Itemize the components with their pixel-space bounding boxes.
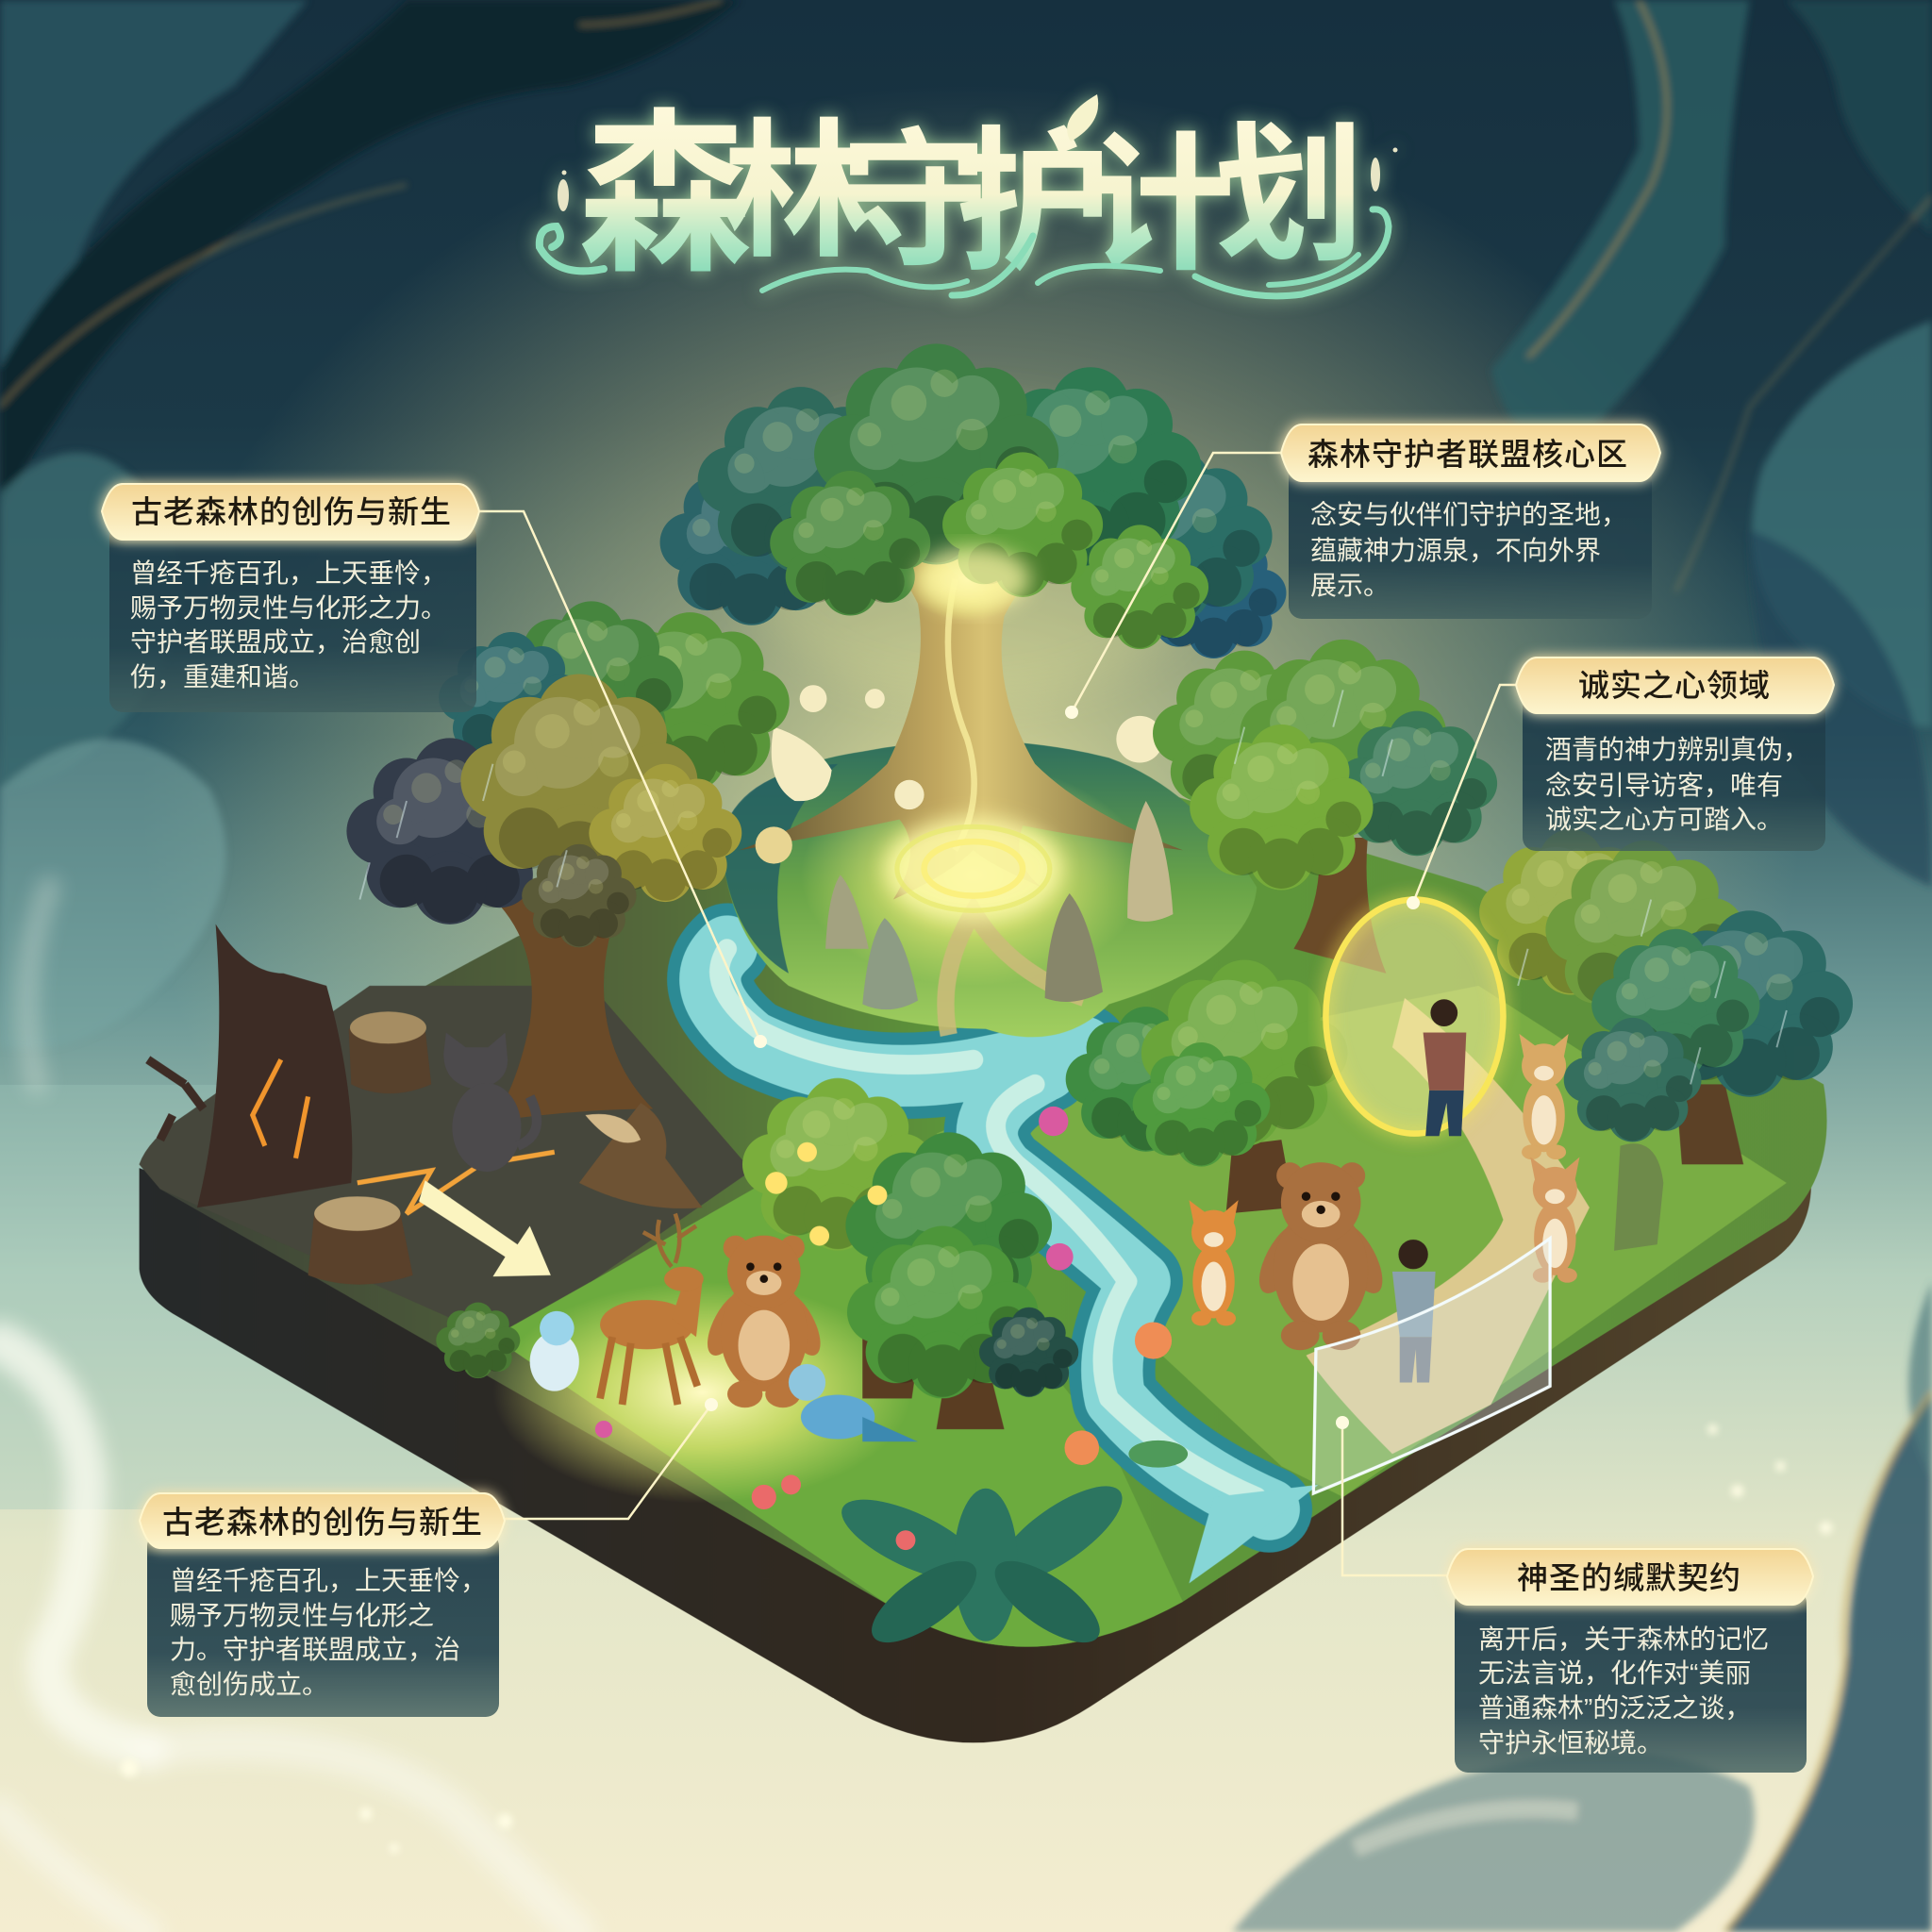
- panel body: [1455, 1590, 1807, 1773]
- body text: [1478, 1624, 1769, 1757]
- body text: 力。守护者联盟成立，治: [170, 1635, 460, 1664]
- heading plate: [1281, 425, 1660, 481]
- title: [540, 94, 1398, 296]
- forest spirits: [756, 685, 1163, 864]
- fox and kangaroo companions: [1189, 1034, 1663, 1325]
- panel body: [1523, 693, 1825, 851]
- bear in meadow: [699, 1236, 829, 1407]
- callout: alliance core: [1281, 425, 1660, 619]
- white bird: [530, 1311, 579, 1391]
- callout: honest heart domain: [1516, 658, 1834, 851]
- shrine glow spiral: [885, 817, 1062, 921]
- panel body: [147, 1533, 499, 1717]
- body text: 曾经千疮百孔，上天垂怜，: [130, 558, 447, 588]
- glowing honesty portal: [1325, 899, 1503, 1134]
- island ground surface: [140, 740, 1827, 1647]
- cut stump front: [308, 1205, 413, 1285]
- white smoke wisps left: [0, 887, 579, 1932]
- tree trunk left: [480, 862, 653, 1122]
- body text: 曾经千疮百孔，上天垂怜，: [170, 1566, 487, 1595]
- floating sparkles: [121, 1424, 1832, 1853]
- flowers: [595, 1107, 1188, 1550]
- body text: 守护者联盟成立，治愈创: [130, 627, 421, 657]
- body text: 离开后，关于森林的记忆: [1478, 1624, 1769, 1654]
- heading text: 古老森林的创伤与新生: [131, 494, 452, 529]
- connector: silence contract callout: [1336, 1416, 1447, 1575]
- broken stump right: [579, 1103, 702, 1208]
- heading plate: [102, 484, 479, 540]
- heading text: 神圣的缄默契约: [1517, 1560, 1741, 1595]
- body text: 守护永恒秘境。: [1478, 1728, 1663, 1757]
- panel body: [109, 524, 476, 712]
- sandy path: [1306, 998, 1590, 1454]
- body text: 愈创伤成立。: [170, 1670, 328, 1699]
- tree canopy: [660, 343, 1286, 658]
- title: 护: [957, 116, 1111, 290]
- body text: 赐予万物灵性与化形之: [170, 1601, 434, 1630]
- right forest trees: [1066, 640, 1853, 1214]
- connector: wound callout: [479, 511, 767, 1048]
- ink swirls top right: [1491, 0, 1932, 887]
- title: 计: [1086, 123, 1235, 289]
- body text: 无法言说，化作对“美丽: [1478, 1658, 1751, 1688]
- burnt tree stump: [148, 924, 702, 1285]
- heading plate: [1516, 658, 1834, 713]
- grey cat: [443, 1033, 537, 1172]
- ember cracks: [358, 1152, 555, 1214]
- tree trunk: [740, 506, 1183, 899]
- title: 林: [723, 109, 872, 275]
- body text: [1310, 500, 1627, 600]
- body text: 普通森林”的泛泛之谈，: [1478, 1693, 1751, 1723]
- callout: wounds and rebirth lower: [140, 1493, 505, 1717]
- rain streaks: [359, 690, 1787, 1084]
- bear with child: [1250, 1162, 1436, 1382]
- blue bird: [789, 1364, 918, 1441]
- body text: [1545, 735, 1809, 834]
- body text: 念安与伙伴们守护的圣地，: [1310, 500, 1627, 529]
- body text: 酒青的神力辨别真伪，: [1545, 735, 1809, 764]
- heading text: 诚实之心领域: [1578, 668, 1771, 703]
- title leaf: [1067, 94, 1098, 142]
- connector: alliance core callout: [1065, 453, 1281, 719]
- heading text: 古老森林的创伤与新生: [162, 1505, 483, 1540]
- connector: honest heart callout: [1407, 685, 1516, 909]
- translucent veil: [1313, 1239, 1550, 1493]
- heading text: 森林守护者联盟核心区: [1307, 437, 1628, 472]
- large oak right: [1293, 838, 1386, 974]
- healing arrow: [419, 1180, 551, 1276]
- foreground leaves: [831, 1470, 1136, 1657]
- island soil block: [140, 1146, 1811, 1742]
- body text: [130, 558, 447, 691]
- title petals: [558, 147, 1398, 211]
- moss bush: [436, 1303, 520, 1378]
- body text: [170, 1566, 487, 1699]
- title: 守: [840, 119, 989, 285]
- river: [710, 946, 1319, 1583]
- heading plate: [140, 1493, 505, 1548]
- shrine mound: [721, 741, 1257, 1037]
- body text: 赐予万物灵性与化形之力。: [130, 593, 447, 623]
- title: 划: [1215, 113, 1364, 279]
- healed meadow: [492, 1183, 1183, 1647]
- burnt ground: [140, 986, 752, 1337]
- title flourishes: [540, 209, 1389, 296]
- body text: 念安引导访客，唯有: [1545, 771, 1783, 800]
- panel body: [1289, 462, 1652, 619]
- deer: [600, 1214, 704, 1405]
- callout: wounds and rebirth: [102, 484, 479, 712]
- callout: sacred silence contract: [1447, 1549, 1813, 1773]
- heading plate: [1447, 1549, 1813, 1605]
- visitor at portal: [1424, 999, 1466, 1136]
- connector: lower wound callout: [505, 1398, 718, 1519]
- body text: 伤，重建和谐。: [130, 662, 315, 691]
- ancient tree: [660, 343, 1286, 899]
- ink swirls top left: [0, 0, 740, 1049]
- right meadow: [937, 986, 1787, 1497]
- cut stump back: [349, 1023, 431, 1093]
- body text: 诚实之心方可踏入。: [1545, 805, 1783, 834]
- body text: 蕴藏神力源泉，不向外界: [1310, 536, 1601, 565]
- stone guardians: [825, 801, 1173, 1009]
- title: 森: [577, 99, 753, 293]
- body text: 展示。: [1310, 571, 1390, 600]
- central glowing trees: [742, 1078, 1078, 1429]
- left forest trees: [346, 601, 790, 1122]
